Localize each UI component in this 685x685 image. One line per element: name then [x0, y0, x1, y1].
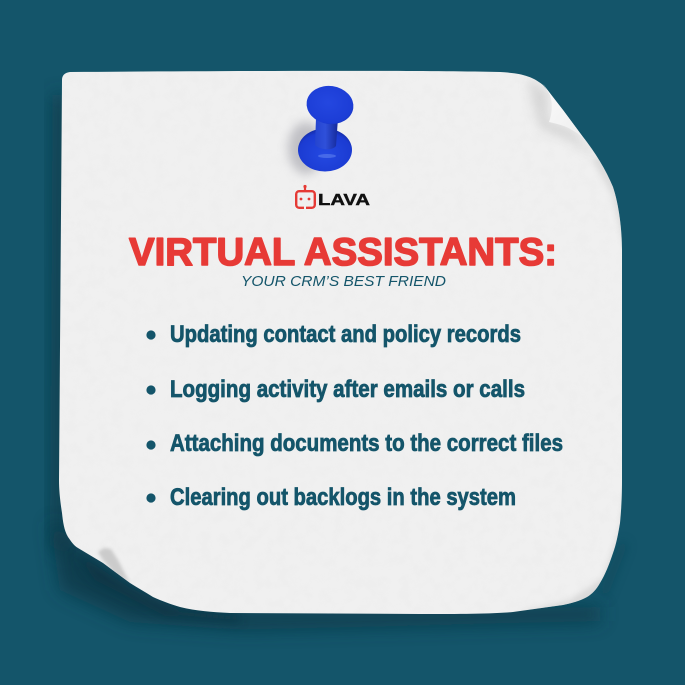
icon: robot head: [296, 185, 315, 209]
bullet 1: Updating contact and policy records: [170, 321, 521, 348]
logo: LAVA: [296, 185, 370, 209]
bullet 4: Clearing out backlogs in the system: [170, 484, 516, 511]
title: VIRTUAL ASSISTANTS:: [129, 231, 557, 274]
bullet list: [147, 321, 563, 511]
subtitle: YOUR CRM’S BEST FRIEND: [241, 273, 446, 290]
bullet 3: Attaching documents to the correct files: [170, 430, 563, 457]
pin: [288, 83, 356, 174]
panel: paper note: [55, 65, 640, 625]
wordmark: LAVA: [318, 192, 370, 209]
bullet 2: Logging activity after emails or calls: [170, 376, 525, 403]
paper curl: top right: [543, 84, 590, 146]
paper drop shadow: [50, 95, 628, 630]
